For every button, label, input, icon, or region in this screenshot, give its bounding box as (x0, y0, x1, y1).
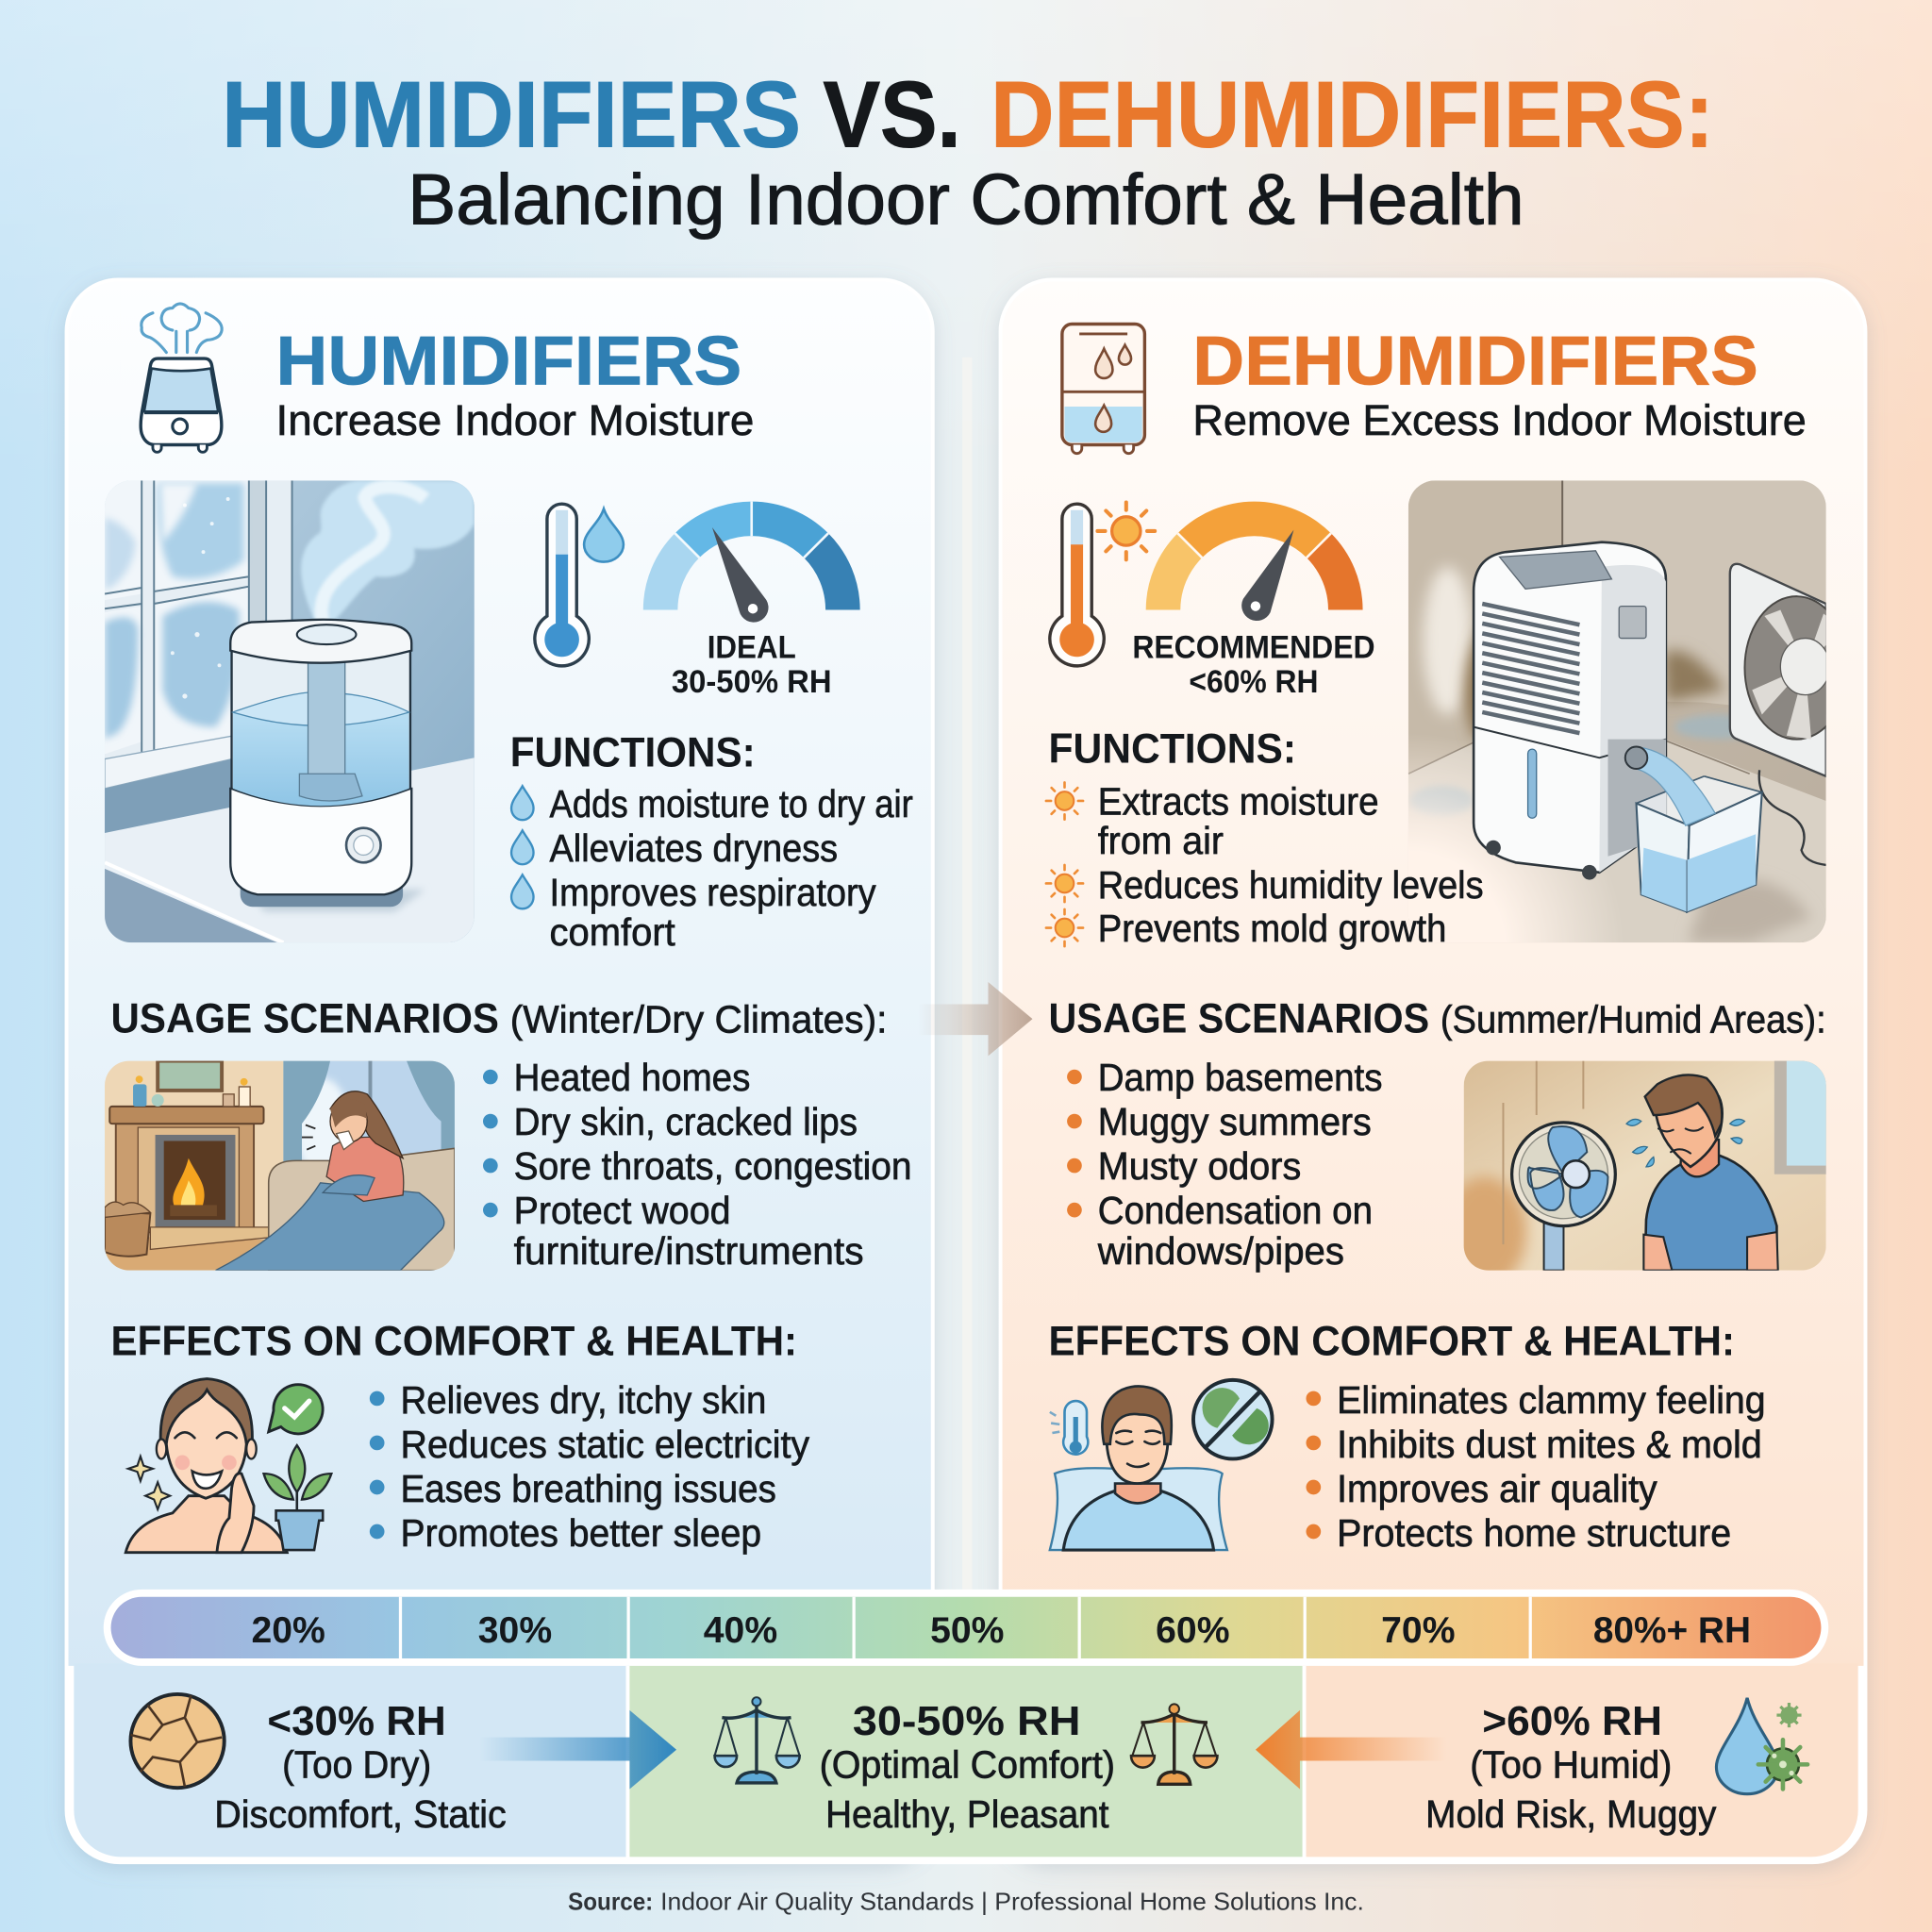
panel: humidifiers (67, 279, 933, 1862)
arrow: toward optimal from dry (479, 1710, 676, 1789)
illustration: sleeping man (1050, 1380, 1273, 1550)
list: effects humidifiers: Reduces static electricity (400, 1423, 810, 1466)
gauge label: ideal: IDEAL (708, 629, 796, 665)
gauge: ideal humidity (643, 502, 860, 623)
scale bar: 80%+ RH (1593, 1610, 1751, 1651)
illustration: woman by fireplace (105, 1061, 455, 1271)
usage scenarios heading: dehumidifiers: (Summer/Humid Areas): (1441, 998, 1826, 1041)
scale bar: 40% (704, 1610, 777, 1651)
icon: cracked dry ground (130, 1694, 225, 1788)
functions: dehumidifiers: Extracts moisture (1098, 779, 1379, 823)
icon: water drop with mold (1716, 1698, 1807, 1794)
text: too humid: (Too Humid) (1470, 1743, 1672, 1787)
humidity scale section (67, 1590, 1865, 1864)
scale bar: 50% (930, 1610, 1004, 1651)
list: usage scenarios humidifiers: Dry skin, cracked lips (514, 1100, 858, 1143)
illustration: dehumidifier in damp room (1408, 480, 1848, 942)
list: usage scenarios dehumidifiers: Condensation on (1098, 1189, 1373, 1232)
gauge label: recommended: <60% RH (1189, 664, 1319, 700)
usage scenarios heading: dehumidifiers: USAGE SCENARIOS (1049, 996, 1429, 1042)
usage scenarios heading: humidifiers: (Winter/Dry Climates): (510, 998, 887, 1041)
list: effects dehumidifiers: Eliminates clammy feeling (1337, 1378, 1766, 1422)
list: effects dehumidifiers: Protects home structure (1337, 1511, 1731, 1555)
gauge label: recommended (1132, 629, 1375, 700)
title (222, 62, 1714, 167)
effects heading: dehumidifiers: EFFECTS ON COMFORT & HEALTH: (1049, 1319, 1735, 1365)
icon: humidifier (141, 304, 222, 452)
functions: dehumidifiers: Prevents mold growth (1098, 907, 1446, 950)
usage scenarios heading: humidifiers (111, 996, 887, 1042)
scale bar (104, 1590, 1828, 1666)
gauge label: recommended: RECOMMENDED (1132, 629, 1375, 665)
functions: humidifiers: comfort (550, 910, 675, 954)
list: usage scenarios humidifiers: furniture/instruments (514, 1229, 864, 1273)
illustration: smiling woman with plant (125, 1379, 331, 1553)
arrow: toward optimal from humid (1256, 1710, 1446, 1789)
list: effects dehumidifiers (1306, 1378, 1766, 1555)
title: HUMIDIFIERS (222, 62, 801, 167)
text: too dry (214, 1699, 507, 1836)
gauge label: ideal: 30-50% RH (672, 664, 832, 700)
title: DEHUMIDIFIERS: (991, 62, 1714, 167)
list: usage scenarios dehumidifiers: Damp basements (1098, 1056, 1382, 1099)
list: usage scenarios humidifiers (483, 1056, 912, 1273)
text: too humid: >60% RH (1482, 1699, 1662, 1744)
gauge: recommended humidity (1146, 502, 1363, 621)
subheading: dehumidifiers: Remove Excess Indoor Moisture (1192, 396, 1807, 444)
heading: dehumidifiers: DEHUMIDIFIERS (1192, 324, 1758, 400)
text: too dry: (Too Dry) (282, 1743, 431, 1787)
zone: too humid background (1306, 1663, 1858, 1857)
list: usage scenarios dehumidifiers: Muggy summers (1098, 1100, 1372, 1143)
scale bar: 20% (251, 1610, 325, 1651)
text: too humid: Mold Risk, Muggy (1425, 1792, 1717, 1836)
icon: water drop (584, 508, 624, 562)
heading: humidifiers: HUMIDIFIERS (276, 324, 741, 400)
list: usage scenarios humidifiers: Protect wood (514, 1189, 731, 1232)
functions: humidifiers: Adds moisture to dry air (550, 782, 913, 825)
list: usage scenarios humidifiers: Heated homes (514, 1056, 750, 1099)
list: usage scenarios humidifiers: Sore throats, congestion (514, 1144, 912, 1188)
usage scenarios heading: dehumidifiers (1049, 996, 1826, 1042)
icon: orange balance scale (1131, 1704, 1217, 1784)
functions: humidifiers (510, 729, 913, 954)
functions: dehumidifiers: FUNCTIONS: (1049, 725, 1296, 772)
effects heading: humidifiers: EFFECTS ON COMFORT & HEALTH: (111, 1319, 797, 1365)
functions: dehumidifiers (1046, 725, 1484, 950)
list: effects dehumidifiers: Inhibits dust mites & mold (1337, 1423, 1762, 1466)
text: too dry: <30% RH (267, 1699, 446, 1744)
usage scenarios heading: humidifiers: USAGE SCENARIOS (111, 996, 499, 1042)
functions: humidifiers: Improves respiratory (550, 871, 876, 914)
list: effects humidifiers (370, 1378, 810, 1555)
icon: sun (1097, 503, 1155, 559)
text: too dry: Discomfort, Static (214, 1792, 507, 1836)
text: optimal: Healthy, Pleasant (825, 1792, 1109, 1836)
list: effects humidifiers: Eases breathing issues (400, 1467, 776, 1510)
source line: Indoor Air Quality Standards | Professional Home Solutions Inc. (660, 1887, 1364, 1915)
zone: too dry background (74, 1663, 626, 1857)
panel: dehumidifiers (1001, 279, 1865, 1862)
icon: blue balance scale (715, 1697, 800, 1783)
text: optimal: (Optimal Comfort) (820, 1743, 1115, 1787)
scale bar: 30% (478, 1610, 552, 1651)
functions: humidifiers: FUNCTIONS: (510, 729, 756, 775)
title: VS. (823, 62, 961, 167)
subtitle: Balancing Indoor Comfort & Health (408, 160, 1524, 241)
list: usage scenarios dehumidifiers (1067, 1056, 1382, 1273)
functions: dehumidifiers: Reduces humidity levels (1098, 863, 1484, 907)
arrow: between panels (918, 982, 1033, 1056)
scale bar: 60% (1156, 1610, 1230, 1651)
source line: Source: (568, 1887, 653, 1915)
list: usage scenarios dehumidifiers: windows/pipes (1097, 1229, 1344, 1273)
list: effects humidifiers: Promotes better sleep (400, 1511, 761, 1555)
list: effects humidifiers: Relieves dry, itchy skin (400, 1378, 766, 1422)
list: usage scenarios dehumidifiers: Musty odors (1098, 1144, 1301, 1188)
icon: thermometer low (535, 504, 589, 666)
text: optimal (820, 1699, 1115, 1836)
functions: humidifiers: Alleviates dryness (550, 826, 838, 870)
icon: thermometer high (1050, 504, 1104, 666)
zone: optimal background (629, 1663, 1303, 1857)
text: too humid (1425, 1699, 1717, 1836)
subheading: humidifiers: Increase Indoor Moisture (276, 396, 754, 444)
gauge label: ideal (672, 629, 832, 700)
illustration: humidifier by frosted window (105, 480, 475, 942)
list: effects dehumidifiers: Improves air quality (1337, 1467, 1657, 1510)
illustration: sweaty man by fan (1464, 1060, 1826, 1271)
text: optimal: 30-50% RH (853, 1699, 1080, 1744)
icon: dehumidifier (1062, 325, 1144, 454)
functions: dehumidifiers: from air (1098, 819, 1224, 862)
scale bar: 70% (1381, 1610, 1456, 1651)
frame: white backing with rounded bottom (67, 1666, 1865, 1864)
